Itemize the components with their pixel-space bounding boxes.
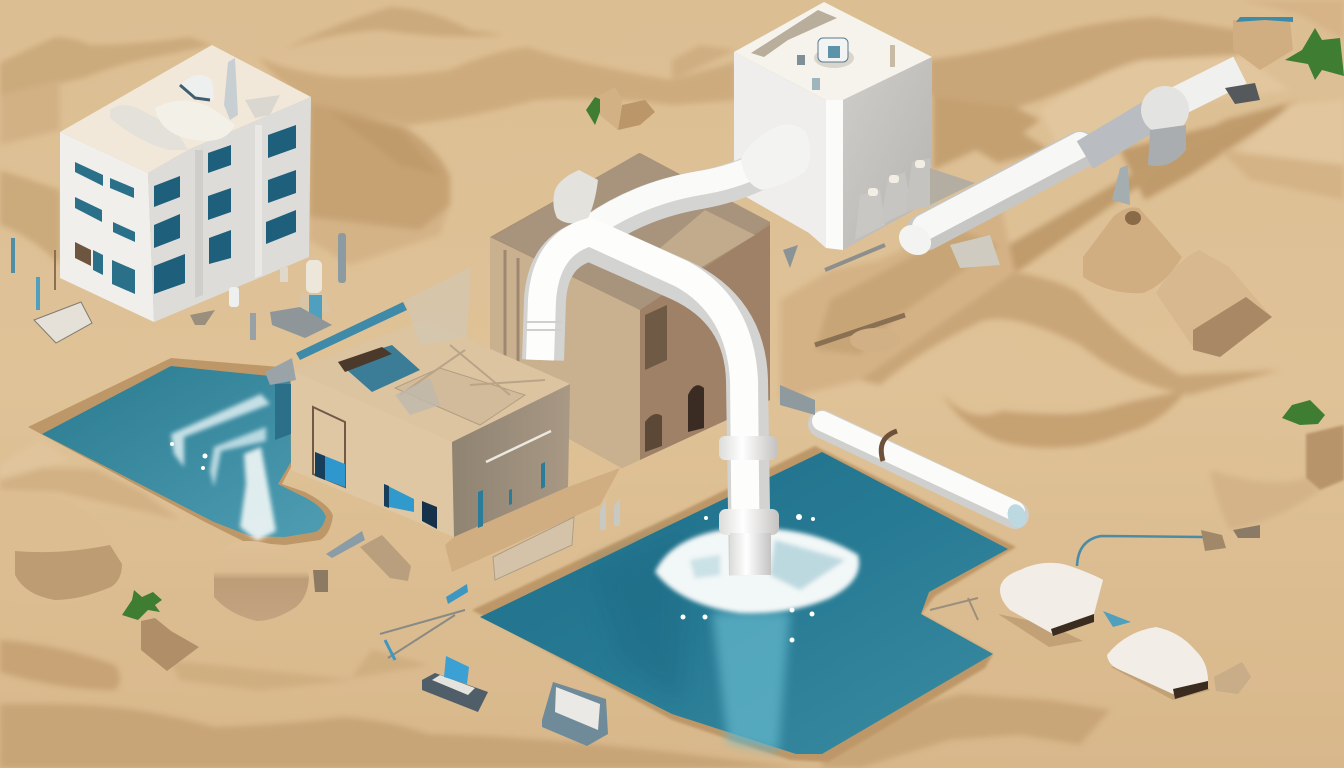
pool ripple: dark shape bbox=[590, 530, 690, 700]
pool: large bbox=[472, 446, 1016, 762]
mound: round tank bbox=[214, 541, 309, 621]
palm: lower left bbox=[122, 590, 162, 620]
machinery: fins at tower base bbox=[855, 158, 975, 240]
rooftop equipment bbox=[110, 58, 280, 150]
windows: tan middle bbox=[645, 305, 667, 370]
pipe collar: tower outlet bbox=[741, 124, 810, 190]
support post: left pool bbox=[275, 384, 291, 440]
building: tan middle bbox=[490, 153, 770, 468]
water splash bbox=[655, 514, 859, 642]
equipment: scattered small parts bbox=[11, 17, 1293, 660]
mound: cone structure bbox=[1083, 207, 1182, 293]
rooftop unit bbox=[797, 38, 895, 90]
windows: left face bbox=[75, 162, 135, 294]
pipe elbow stub bbox=[553, 170, 598, 224]
pipe end knob bbox=[893, 219, 937, 261]
pool: left bbox=[28, 358, 333, 545]
pipe strap bbox=[881, 431, 897, 461]
pipe: right long bbox=[893, 70, 1260, 268]
mound: left dome bbox=[0, 493, 122, 605]
pipe mouth bbox=[1004, 502, 1030, 530]
palm: right bbox=[1282, 400, 1325, 425]
rock: small top mound bbox=[600, 87, 655, 130]
equipment: carts bottom bbox=[422, 656, 608, 746]
palm: top right bbox=[1285, 28, 1344, 80]
ledge: building base bbox=[445, 468, 620, 572]
pipe: main arch into pool bbox=[526, 232, 779, 575]
windows: right face bbox=[154, 125, 296, 294]
building: white left bbox=[60, 45, 311, 322]
cliff: under palm bbox=[141, 618, 199, 671]
pipe supports bbox=[1148, 125, 1186, 166]
building: tan front bbox=[291, 320, 620, 572]
palm: small top bbox=[586, 97, 614, 125]
mound: top right pedestal bbox=[1233, 20, 1293, 70]
pipe: lower right bbox=[822, 421, 1030, 530]
equipment: pods lower right bbox=[998, 525, 1260, 700]
roof details bbox=[338, 345, 545, 425]
water jets: left pool bbox=[170, 394, 276, 541]
building: white top bbox=[734, 2, 932, 250]
mound: rock block bbox=[1156, 250, 1272, 357]
pipe joint bbox=[1141, 86, 1189, 134]
water reflection: light column bbox=[712, 612, 790, 752]
pipe collars bbox=[719, 436, 777, 460]
cliff: right bbox=[1306, 425, 1344, 490]
pipe: upper branch bbox=[553, 124, 810, 232]
doors and windows bbox=[313, 407, 551, 529]
